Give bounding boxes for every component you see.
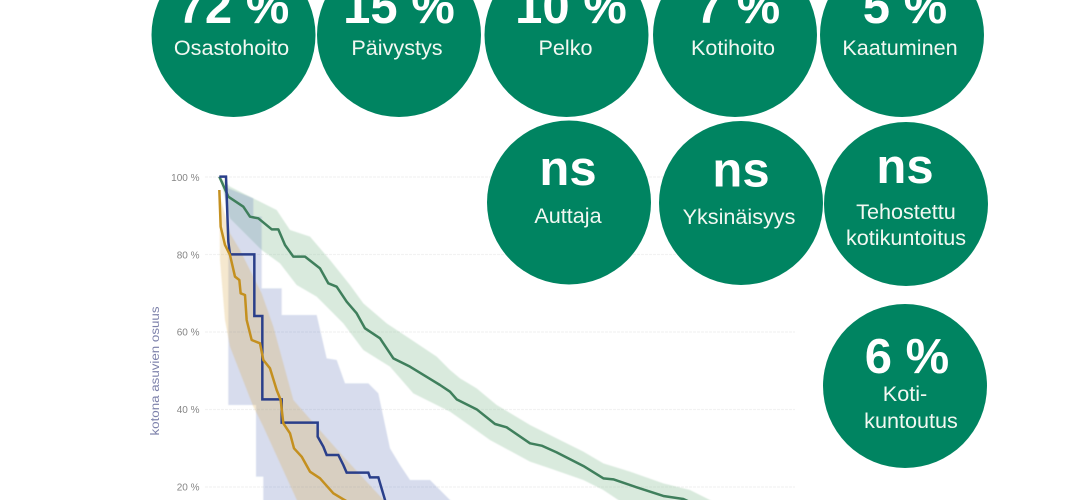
stat circle: Osastohoito <box>152 0 316 117</box>
confidence bands and curves <box>219 177 717 500</box>
y axis tick labels: 40 % <box>177 405 200 416</box>
y axis tick labels: 60 % <box>177 328 200 338</box>
stat circle: Koti-kuntoutus: kuntoutus <box>864 408 958 433</box>
stat circle: Auttaja <box>487 120 651 284</box>
stat circle: Tehostettu kotikuntoitus <box>824 122 988 286</box>
stat circle: Kotihoito <box>653 0 817 117</box>
band: blue <box>224 187 453 500</box>
stat circle: Osastohoito: Osastohoito <box>174 35 289 60</box>
stat circle: Päivystys: Päivystys <box>351 35 443 60</box>
stat circle: Kaatuminen <box>820 0 984 117</box>
stat circle: Yksinäisyys: Yksinäisyys <box>683 204 796 229</box>
stat circle: Tehostettu kotikuntoitus: Tehostettu <box>856 199 956 224</box>
line: blue <box>219 177 386 500</box>
band: green <box>219 177 717 500</box>
stat circle: Yksinäisyys: ns <box>712 144 770 198</box>
stat circle: Pelko <box>484 0 648 117</box>
stat circle: Auttaja: ns <box>539 142 597 196</box>
stat circle: Yksinäisyys <box>659 121 823 285</box>
y axis title: kotona asuvien osuus <box>150 306 162 436</box>
survival chart <box>150 173 795 500</box>
stat circle: Kotihoito: Kotihoito <box>691 35 775 60</box>
y axis tick labels: 20 % <box>177 482 200 494</box>
band: orange <box>219 193 387 500</box>
line: orange <box>219 190 353 500</box>
y axis tick labels <box>171 173 200 494</box>
stat circle: Kaatuminen: Kaatuminen <box>842 35 958 60</box>
y axis tick labels: 100 % <box>171 173 200 184</box>
stat circle: Auttaja: Auttaja <box>534 203 603 228</box>
stat circle: Koti-kuntoutus: 6 % <box>865 330 949 384</box>
line: green <box>219 177 700 500</box>
y axis tick labels: 80 % <box>177 250 200 262</box>
stat circle: Päivystys <box>317 0 481 117</box>
stat circle: Tehostettu kotikuntoitus: ns <box>876 140 934 194</box>
stat circle: Koti-kuntoutus: Koti- <box>883 381 927 406</box>
stat circle: Koti-kuntoutus <box>823 304 987 468</box>
stat circle: Tehostettu kotikuntoitus: kotikuntoitus <box>846 225 966 250</box>
stat circle: Pelko: Pelko <box>538 35 593 60</box>
